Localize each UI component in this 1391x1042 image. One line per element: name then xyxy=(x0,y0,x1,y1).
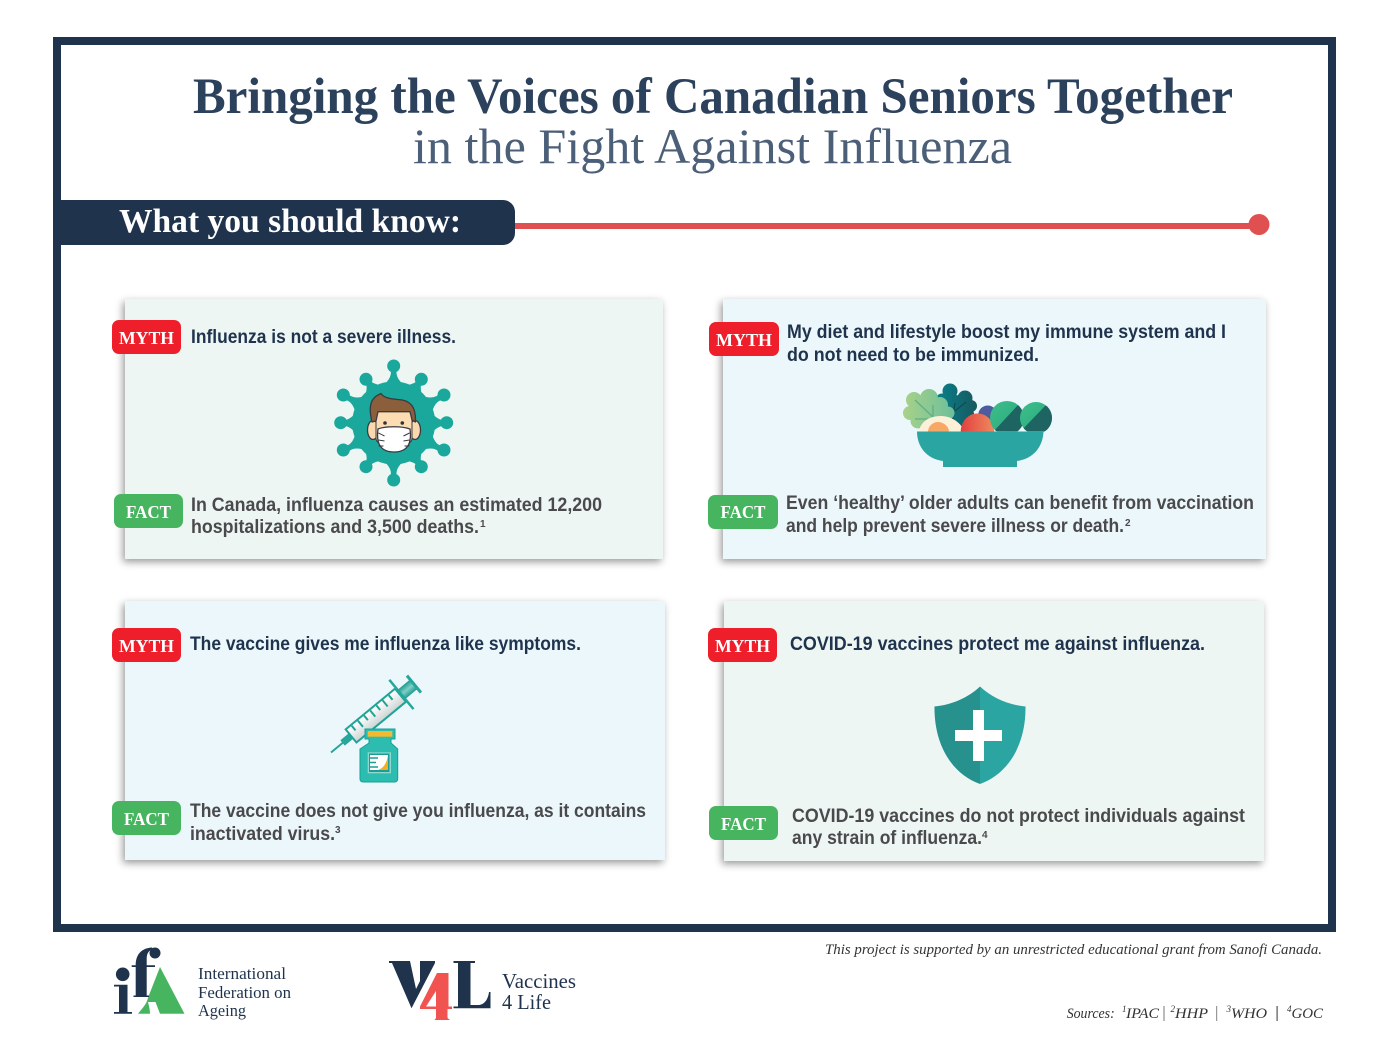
sources: Sources: xyxy=(1067,1006,1115,1022)
banner red line with end dot xyxy=(515,214,1270,235)
myth tag: MYTH xyxy=(716,330,772,350)
logo: International Federation on Ageing xyxy=(114,948,291,1020)
myth tag xyxy=(112,628,181,662)
sources: 1 xyxy=(1122,1004,1126,1014)
myth statement xyxy=(787,322,1226,366)
fact statement: 2 xyxy=(1125,518,1131,529)
fact statement xyxy=(792,806,1246,849)
fact statement: COVID-19 vaccines do not protect individuals against xyxy=(792,806,1246,827)
logo: International Federation on Ageing: Ageing xyxy=(198,1001,246,1020)
fact statement: any strain of influenza. xyxy=(792,828,982,849)
myth statement: do not need to be immunized. xyxy=(787,345,1039,366)
sources: WHO xyxy=(1231,1006,1267,1022)
sources: 4 xyxy=(1287,1004,1292,1014)
logo: International Federation on Ageing: International xyxy=(198,964,286,983)
fact tag: FACT xyxy=(721,814,766,834)
myth tag: MYTH xyxy=(119,636,174,656)
icon: syringe and vial xyxy=(319,669,427,782)
logo: Vaccines 4 Life: 4 Life xyxy=(502,990,551,1014)
fact statement: and help prevent severe illness or death. xyxy=(786,516,1124,537)
title xyxy=(193,69,1233,174)
fact tag xyxy=(114,494,183,528)
fact statement xyxy=(786,493,1254,537)
fact statement: Even ‘healthy’ older adults can benefit from vaccination xyxy=(786,493,1254,514)
panel: myth 1 influenza severity xyxy=(112,299,663,559)
myth statement: The vaccine gives me influenza like symptoms. xyxy=(190,634,581,655)
myth statement: Influenza is not a severe illness. xyxy=(191,327,456,348)
sources: GOC xyxy=(1292,1006,1324,1022)
fact tag xyxy=(709,806,778,840)
title: in the Fight Against Influenza xyxy=(413,118,1012,174)
sources: HHP xyxy=(1174,1006,1208,1022)
sources: 3 xyxy=(1226,1004,1232,1014)
myth tag xyxy=(709,322,779,356)
panel: myth 4 covid vaccines xyxy=(708,601,1264,861)
fact tag: FACT xyxy=(124,809,169,829)
fact statement: The vaccine does not give you influenza, as it contains xyxy=(190,801,646,822)
page frame xyxy=(57,41,1332,928)
myth statement: My diet and lifestyle boost my immune system and I xyxy=(787,322,1226,343)
section banner: what you should know xyxy=(61,200,515,245)
fact statement: In Canada, influenza causes an estimated 12,200 xyxy=(191,495,602,516)
fact statement: 4 xyxy=(982,830,988,841)
icon: virus with masked face xyxy=(334,360,453,486)
logo: International Federation on Ageing: Federation on xyxy=(198,983,291,1002)
myth tag xyxy=(708,628,777,662)
fact statement xyxy=(191,495,602,538)
logo: Vaccines 4 Life xyxy=(389,961,576,1020)
myth tag: MYTH xyxy=(715,636,770,656)
panel: myth 3 vaccine symptoms xyxy=(112,601,665,860)
fact tag: FACT xyxy=(126,502,171,522)
fact tag: FACT xyxy=(720,502,766,522)
title: Bringing the Voices of Canadian Seniors Together xyxy=(193,69,1233,125)
fact tag xyxy=(708,495,778,529)
panel: myth 2 diet and lifestyle xyxy=(708,299,1266,559)
fact statement: 3 xyxy=(335,825,341,836)
myth tag: MYTH xyxy=(119,328,174,348)
fact tag xyxy=(112,801,181,835)
fact statement: 1 xyxy=(480,519,486,530)
fact statement: hospitalizations and 3,500 deaths. xyxy=(191,517,479,538)
icon: medical shield xyxy=(934,686,1026,784)
myth tag xyxy=(112,320,181,354)
fact statement: inactivated virus. xyxy=(190,824,335,845)
section banner: what you should know: What you should know: xyxy=(119,203,461,240)
sponsor note: This project is supported by an unrestricted educational grant from Sanofi Canada. xyxy=(825,942,1322,958)
logo: Vaccines 4 Life: Vaccines xyxy=(502,969,576,993)
sources: IPAC xyxy=(1125,1006,1160,1022)
fact statement xyxy=(190,801,646,845)
icon: salad bowl xyxy=(903,384,1056,467)
sources xyxy=(1067,1004,1324,1022)
sources: 2 xyxy=(1170,1004,1176,1014)
myth statement: COVID-19 vaccines protect me against influenza. xyxy=(790,634,1205,655)
